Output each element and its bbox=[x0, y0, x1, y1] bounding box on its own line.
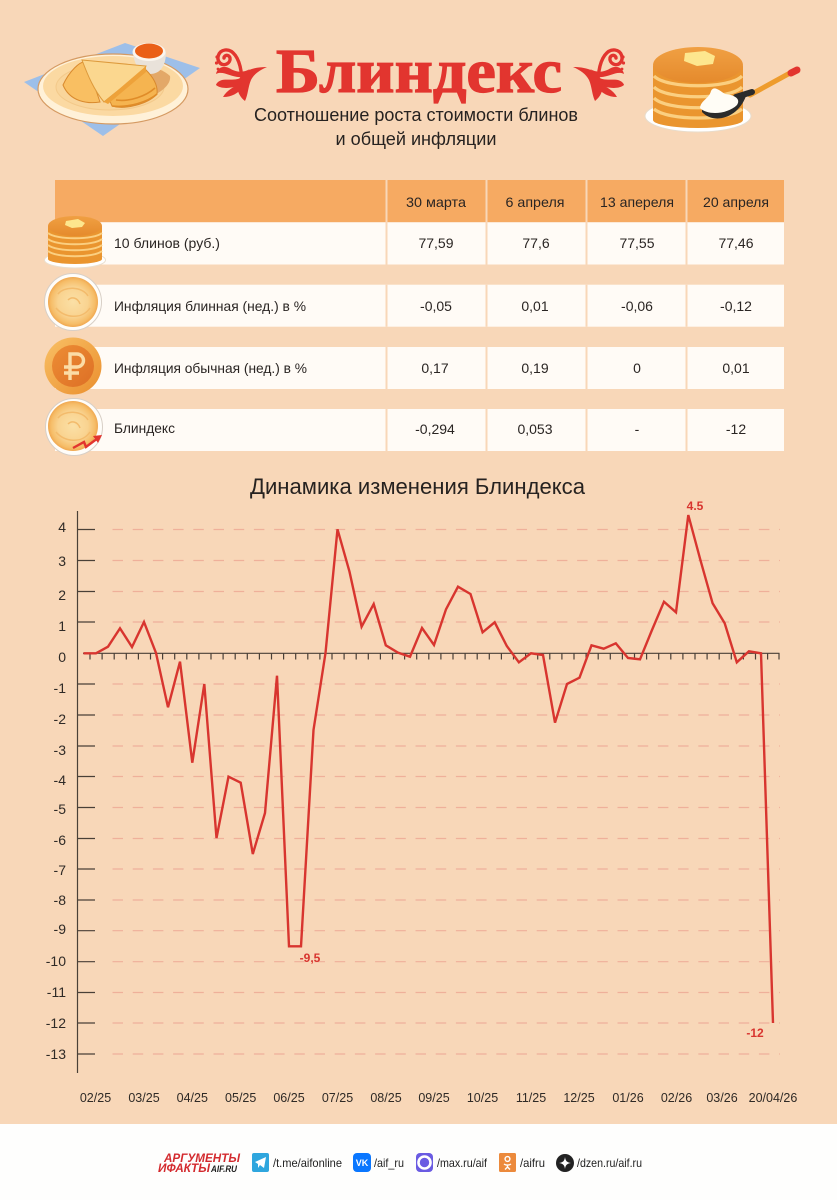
row: инфляция обычная: 0 bbox=[633, 360, 641, 376]
data label: latest: -12 bbox=[746, 1026, 764, 1040]
icon: pancake with red arrow bbox=[46, 398, 102, 456]
table bbox=[55, 180, 784, 451]
x axis labels: 06/25 bbox=[273, 1091, 305, 1105]
row: 10 блинов: 77,6 bbox=[522, 235, 550, 251]
x axis labels: 09/25 bbox=[418, 1091, 450, 1105]
x axis labels: 02/26 bbox=[661, 1091, 692, 1105]
row: Блиндекс: Блиндекс bbox=[114, 420, 175, 436]
y axis labels: -9 bbox=[54, 921, 66, 937]
row: 10 блинов: 77,59 bbox=[418, 235, 454, 251]
row: инфляция блинная: -0,05 bbox=[420, 298, 452, 314]
y axis labels: -2 bbox=[54, 711, 66, 727]
x axis labels: 03/26 bbox=[706, 1091, 738, 1105]
logo: Аргументы и Факты: АРГУМЕНТЫ bbox=[163, 1151, 241, 1165]
y axis labels: -1 bbox=[54, 680, 66, 696]
y axis labels: -5 bbox=[54, 801, 66, 817]
table header row: 20 апреля bbox=[703, 194, 769, 210]
social: vk: VK bbox=[356, 1158, 369, 1168]
row: инфляция обычная bbox=[55, 347, 784, 389]
y axis labels: -8 bbox=[54, 892, 66, 908]
logo: Аргументы и Факты: ИФАКТЫ bbox=[158, 1161, 211, 1175]
social: vk: /aif_ru bbox=[374, 1156, 404, 1170]
title: Блиндекс bbox=[276, 38, 562, 106]
row: инфляция блинная bbox=[55, 285, 784, 327]
y axis labels: 2 bbox=[58, 587, 66, 603]
row: инфляция обычная: 0,17 bbox=[421, 360, 449, 376]
x axis labels: 07/25 bbox=[322, 1091, 353, 1105]
data label: max: 4.5 bbox=[687, 499, 704, 513]
social: max: /max.ru/aif bbox=[437, 1156, 488, 1170]
row: 10 блинов: 10 блинов (руб.) bbox=[114, 235, 220, 251]
x axis labels: 10/25 bbox=[467, 1091, 498, 1105]
social: dzen bbox=[556, 1154, 642, 1172]
illustration: pancake stack with sour cream bbox=[645, 47, 797, 132]
row: Блиндекс: - bbox=[635, 421, 640, 437]
x axis labels bbox=[80, 1091, 797, 1105]
social: odnoklassniki: /aifru bbox=[520, 1156, 545, 1170]
illustration: plate of crepes bbox=[24, 43, 200, 136]
social: telegram bbox=[252, 1153, 342, 1172]
table header row: 6 апреля bbox=[506, 194, 564, 210]
x axis labels: 02/25 bbox=[80, 1091, 111, 1105]
icon: pancake stack bbox=[44, 216, 106, 268]
x axis labels: 04/25 bbox=[177, 1091, 208, 1105]
y axis labels: 3 bbox=[58, 553, 66, 569]
y axis labels bbox=[46, 519, 66, 1062]
y axis labels: -12 bbox=[46, 1015, 66, 1031]
social: vk bbox=[353, 1153, 404, 1172]
line chart bbox=[46, 499, 797, 1105]
row: Блиндекс: -12 bbox=[726, 421, 746, 437]
subtitle bbox=[254, 105, 578, 149]
row: 10 блинов: 77,46 bbox=[718, 235, 754, 251]
bowl of caviar bbox=[132, 43, 166, 74]
icon: pancake bbox=[44, 274, 102, 330]
logo: Аргументы и Факты bbox=[158, 1151, 241, 1175]
row: 10 блинов: 77,55 bbox=[619, 235, 655, 251]
y axis labels: -10 bbox=[46, 953, 66, 969]
row: Блиндекс: -0,294 bbox=[415, 421, 455, 437]
x axis labels: 05/25 bbox=[225, 1091, 256, 1105]
footer band bbox=[0, 1124, 837, 1200]
data line bbox=[84, 515, 773, 1023]
y axis labels: -3 bbox=[54, 742, 66, 758]
y axis labels: 0 bbox=[58, 649, 66, 665]
x axis labels: 08/25 bbox=[370, 1091, 402, 1105]
row: инфляция обычная: 0,19 bbox=[521, 360, 549, 376]
social: odnoklassniki bbox=[499, 1153, 545, 1172]
y axis labels: 4 bbox=[58, 519, 66, 535]
y axis labels: 1 bbox=[58, 618, 66, 634]
y axis bbox=[78, 511, 95, 1073]
table header row bbox=[55, 180, 784, 222]
row: 10 блинов bbox=[55, 222, 784, 264]
x axis labels: 12/25 bbox=[563, 1091, 595, 1105]
ornament: left flourish bbox=[215, 50, 267, 101]
y axis labels: -4 bbox=[54, 772, 66, 788]
grid lines bbox=[112, 530, 780, 1054]
social: telegram: /t.me/aifonline bbox=[273, 1156, 342, 1170]
table header row: 13 апереля bbox=[600, 194, 674, 210]
logo: Аргументы и Факты: AIF.RU bbox=[210, 1164, 238, 1175]
icon: ruble coin bbox=[44, 338, 102, 394]
ornament: right flourish bbox=[573, 50, 625, 101]
y axis labels: -7 bbox=[54, 862, 66, 878]
y axis labels: -6 bbox=[54, 832, 66, 848]
social: dzen: /dzen.ru/aif.ru bbox=[577, 1156, 642, 1170]
chart heading: Динамика изменения Блиндекса bbox=[250, 474, 586, 499]
row: инфляция блинная: -0,06 bbox=[621, 298, 653, 314]
row: инфляция блинная: 0,01 bbox=[521, 298, 549, 314]
y axis labels: -11 bbox=[47, 984, 66, 1000]
row: инфляция блинная: Инфляция блинная (нед.) в % bbox=[114, 298, 306, 314]
row: Блиндекс: 0,053 bbox=[517, 421, 553, 437]
subtitle: Соотношение роста стоимости блинов bbox=[254, 105, 578, 125]
row: инфляция обычная: 0,01 bbox=[722, 360, 750, 376]
x axis labels: 11/25 bbox=[516, 1091, 546, 1105]
x axis bbox=[83, 653, 780, 660]
table header row: 30 марта bbox=[406, 194, 466, 210]
y axis labels: -13 bbox=[46, 1046, 66, 1062]
row: инфляция блинная: -0,12 bbox=[720, 298, 752, 314]
x axis labels: 20/04/26 bbox=[749, 1091, 797, 1105]
x axis labels: 01/26 bbox=[612, 1091, 644, 1105]
row: Блиндекс bbox=[55, 409, 784, 451]
data label: min 2025: -9,5 bbox=[300, 951, 321, 965]
subtitle: и общей инфляции bbox=[336, 129, 496, 149]
social: max bbox=[416, 1153, 488, 1172]
x axis labels: 03/25 bbox=[128, 1091, 160, 1105]
row: инфляция обычная: Инфляция обычная (нед.) в % bbox=[114, 360, 307, 376]
